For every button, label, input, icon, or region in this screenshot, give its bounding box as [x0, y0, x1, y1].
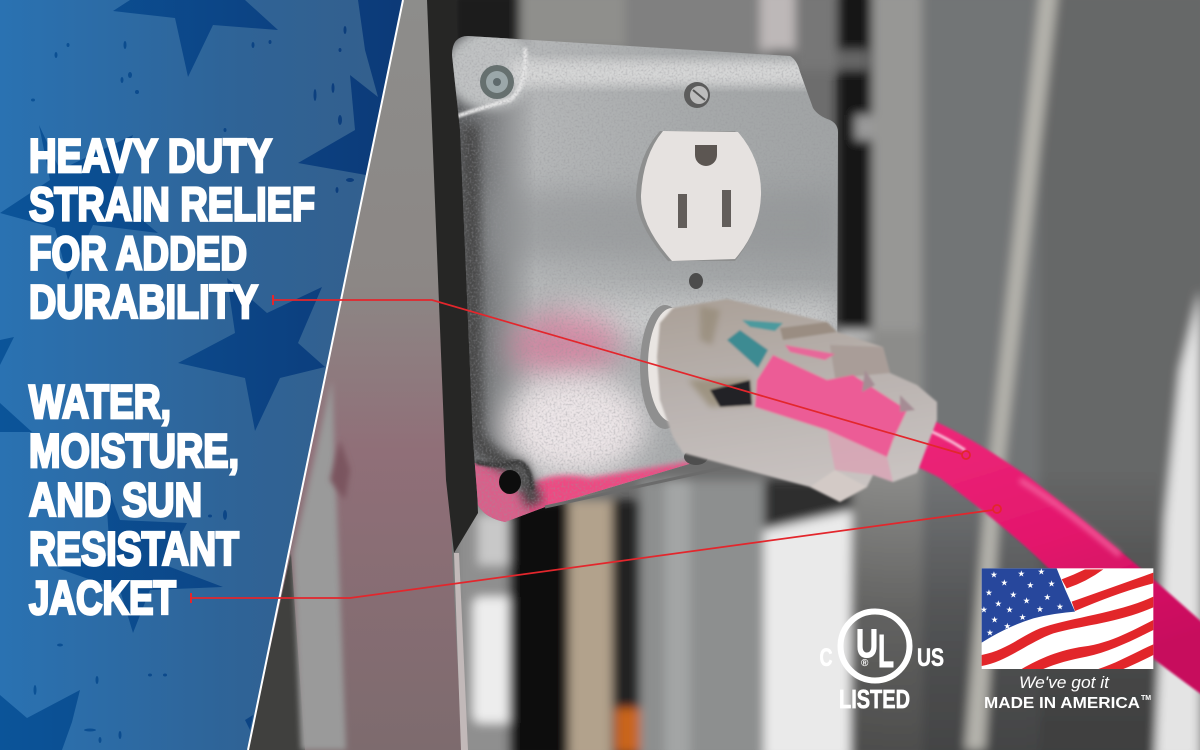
heading: strain relief: STRAIN RELIEF — [29, 178, 315, 230]
pink cord — [893, 413, 1200, 697]
heading: strain relief: HEAVY DUTY — [29, 129, 272, 182]
metal bracket — [248, 0, 478, 750]
UL listed mark — [820, 612, 944, 714]
American flag: ★ — [990, 569, 998, 579]
icon: center screw — [689, 273, 703, 289]
UL listed mark: LISTED — [839, 684, 910, 714]
heading: jacket: AND SUN — [29, 473, 202, 526]
heading: strain relief: FOR ADDED — [29, 226, 247, 280]
American flag: ★ — [1017, 569, 1025, 579]
junction box cover — [452, 36, 838, 522]
American flag: ★ — [1009, 589, 1017, 599]
American flag: ★ — [1023, 596, 1031, 606]
American flag: ★ — [991, 614, 999, 624]
American flag: ★ — [1056, 601, 1064, 611]
heading: jacket: MOISTURE, — [29, 424, 239, 477]
icon: lower screw — [684, 449, 708, 465]
made in america tagline: We've got it — [1019, 674, 1110, 692]
heading: strain relief: DURABILITY — [29, 275, 258, 328]
heading: jacket: WATER, — [29, 375, 171, 428]
American flag: ★ — [1037, 566, 1045, 576]
decorative stars — [0, 0, 403, 750]
American flag: ★ — [1006, 604, 1014, 614]
American flag: ★ — [1043, 592, 1051, 602]
American flag — [980, 566, 1153, 669]
American flag: ★ — [986, 628, 994, 638]
icon: corner screw — [480, 65, 514, 99]
made in america tagline: TM — [1141, 695, 1151, 702]
made in america tagline: MADE IN AMERICA — [984, 695, 1140, 712]
UL listed mark: L — [878, 625, 894, 677]
American flag: ★ — [1000, 578, 1008, 588]
heading: jacket — [29, 375, 239, 624]
UL listed mark: ® — [861, 658, 869, 669]
American flag: ★ — [1019, 612, 1027, 622]
bracket dark flange — [427, 0, 478, 553]
American flag: ★ — [1036, 604, 1044, 614]
plug with translucent housing — [640, 299, 937, 502]
heading: jacket: JACKET — [29, 571, 176, 624]
UL listed mark: U — [856, 622, 878, 666]
American flag: ★ — [1003, 621, 1011, 631]
left text panel — [0, 0, 403, 750]
American flag: ★ — [994, 599, 1002, 609]
pink overspray — [510, 313, 620, 377]
UL listed mark: US — [917, 644, 944, 672]
lower box edge — [545, 463, 745, 507]
icon: mounting hole — [499, 470, 521, 494]
heading: jacket: RESISTANT — [29, 522, 239, 575]
American flag: ★ — [1048, 578, 1056, 588]
heading: strain relief — [29, 129, 315, 328]
box left shadow band — [470, 125, 535, 505]
callout line: strain relief — [273, 295, 970, 459]
UL listed mark: C — [820, 644, 832, 672]
American flag: ★ — [980, 604, 988, 614]
icon: top screw — [684, 82, 710, 108]
grunge specks — [31, 26, 354, 743]
made in america tagline — [984, 674, 1151, 712]
American flag: ★ — [1026, 580, 1034, 590]
American flag: ★ — [985, 587, 993, 597]
callout line: jacket — [191, 505, 1001, 603]
icon: outlet — [636, 131, 761, 261]
panel edge line — [248, 0, 403, 750]
